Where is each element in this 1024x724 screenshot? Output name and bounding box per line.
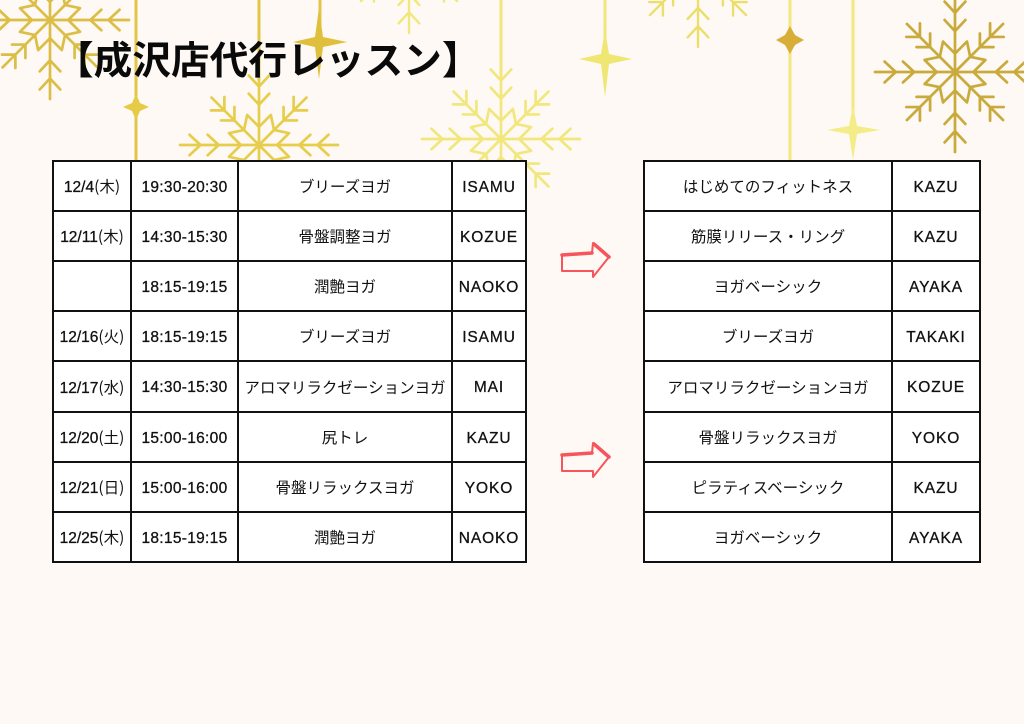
row: 12/11 afternoon: 12/11(木) xyxy=(60,225,124,247)
row 8 xyxy=(714,526,963,548)
row 1: KAZU xyxy=(914,178,958,196)
row 3: AYAKA xyxy=(909,278,963,296)
row: 12/4: ISAMU xyxy=(462,178,516,196)
row: 12/17 xyxy=(60,376,504,398)
row: 12/4: 19:30-20:30 xyxy=(141,178,228,196)
row 6: 骨盤リラックスヨガ xyxy=(698,426,838,448)
row: 12/11 afternoon: 骨盤調整ヨガ xyxy=(298,225,392,247)
row: 12/25: 潤艶ヨガ xyxy=(314,526,376,548)
row 8: ヨガベーシック xyxy=(714,526,822,548)
row: 12/20: 15:00-16:00 xyxy=(141,430,228,446)
snowflake: centre left xyxy=(180,66,338,224)
row 4: ブリーズヨガ xyxy=(722,325,814,347)
row 1 xyxy=(667,175,966,548)
table: original lesson schedule xyxy=(52,160,527,563)
row: 12/11 evening: 18:15-19:15 xyxy=(141,278,228,296)
row 7 xyxy=(692,476,958,498)
diamond: left xyxy=(123,94,149,120)
row 5 xyxy=(667,376,965,398)
row 3 xyxy=(714,275,963,297)
snowflake: top left xyxy=(0,0,129,99)
row 2: KAZU xyxy=(914,228,958,246)
row 7: ピラティスベーシック xyxy=(692,476,844,498)
row: 12/17: 14:30-15:30 xyxy=(141,379,228,396)
row: 12/25: 12/25(木) xyxy=(60,526,124,548)
row: 12/17: MAI xyxy=(474,379,504,396)
title: 【成沢店代行レッスン】 xyxy=(55,30,481,86)
row: 12/16: 12/16(火) xyxy=(60,325,124,347)
star: pale right xyxy=(827,105,880,160)
row 7: KAZU xyxy=(914,480,958,496)
row: 12/21: 15:00-16:00 xyxy=(141,480,228,496)
row 6 xyxy=(698,426,960,448)
row: 12/16 xyxy=(60,325,516,347)
row: 12/11 evening: 潤艶ヨガ xyxy=(314,275,376,297)
row: 12/11 evening xyxy=(141,275,519,297)
row 5: KOZUE xyxy=(907,379,965,396)
row: 12/4: 12/4(木) xyxy=(64,175,120,197)
row: 12/11 afternoon xyxy=(60,225,518,247)
row: 12/21: 12/21(日) xyxy=(60,476,124,498)
row: 12/16: 18:15-19:15 xyxy=(141,328,228,346)
snowflake: top centre pale xyxy=(329,0,489,33)
table: substitute lessons xyxy=(643,160,981,563)
row: 12/11 afternoon: 14:30-15:30 xyxy=(141,228,228,246)
row: 12/20 xyxy=(60,426,511,448)
snowflake: centre pale xyxy=(422,60,580,218)
row: 12/21: 骨盤リラックスヨガ xyxy=(275,476,415,498)
row 2: 筋膜リリース・リング xyxy=(691,225,845,247)
row: 12/17: アロマリラクゼーションヨガ xyxy=(244,376,446,398)
row: 12/17: 12/17(水) xyxy=(60,376,124,398)
row: 12/21 xyxy=(60,476,513,498)
row: 12/25 xyxy=(60,526,519,548)
row: 12/16: ブリーズヨガ xyxy=(299,325,391,347)
row 8: AYAKA xyxy=(909,530,963,546)
snowflake: right xyxy=(875,0,1024,152)
row 2 xyxy=(691,225,958,247)
snowflake: top right pale xyxy=(618,0,778,47)
row 1: はじめてのフィットネス xyxy=(683,175,853,197)
row: 12/11 afternoon: KOZUE xyxy=(460,228,518,246)
star: pale left xyxy=(579,30,632,97)
row: 12/20: 12/20(土) xyxy=(60,426,124,448)
row 6: YOKO xyxy=(912,430,960,446)
row: 12/20: 尻トレ xyxy=(322,426,368,448)
row: 12/21: YOKO xyxy=(465,480,513,496)
row: 12/4 xyxy=(60,175,519,548)
star: gold xyxy=(293,8,347,79)
row 3: ヨガベーシック xyxy=(714,275,822,297)
row: 12/11 evening: NAOKO xyxy=(459,278,519,296)
row: 12/20: KAZU xyxy=(467,430,511,446)
diamond: right xyxy=(776,26,804,54)
row: 12/16: ISAMU xyxy=(462,328,516,346)
arrow: upper xyxy=(560,242,611,278)
hanging lines xyxy=(136,0,853,160)
row 4: TAKAKI xyxy=(906,328,966,346)
row: 12/4: ブリーズヨガ xyxy=(299,175,391,197)
row: 12/25: NAOKO xyxy=(459,530,519,546)
row: 12/25: 18:15-19:15 xyxy=(141,530,228,546)
arrow: lower xyxy=(560,442,611,478)
row 5: アロマリラクゼーションヨガ xyxy=(667,376,869,398)
row 4 xyxy=(722,325,966,347)
